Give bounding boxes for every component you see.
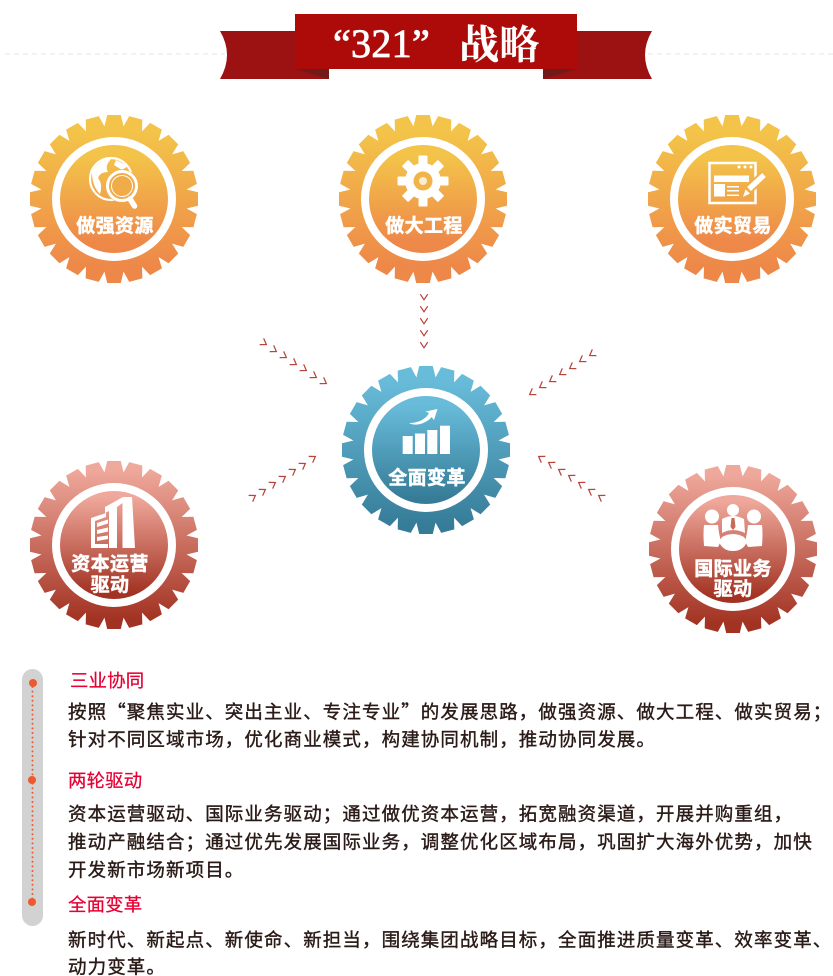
label: 做实贸易 [694,214,772,237]
title text: 战略 [459,14,540,70]
white ring [52,483,176,607]
text block: 三业协同 [68,667,832,752]
gear body [339,115,507,283]
gear body [30,461,198,629]
body: 推动产融结合；通过优先发展国际业务，调整优化区域布局，巩固扩大海外优势，加快 [68,828,813,854]
white ring [52,137,176,261]
title text: “321” [333,21,430,66]
label: 资本运营 [71,553,149,575]
inner disc [679,495,787,603]
inner disc [369,145,477,253]
arrow: lower left to centre [249,453,317,502]
label: 做大工程 [385,215,463,237]
gear: 全面变革 [342,366,510,534]
body: 按照“聚焦实业、突出主业、专注专业”的发展思路，做强资源、做大工程、做实贸易； [68,698,832,724]
body: 开发新市场新项目。 [68,856,244,882]
icon: office buildings [91,497,135,548]
white ring [671,487,795,611]
icon: three business people [704,504,762,551]
title banner [220,14,652,79]
rail node 1 [29,679,37,687]
rail node 3 [28,898,36,906]
gear body [342,366,510,534]
arrow: top gear to centre [420,294,428,348]
arrow: upper left to centre [260,338,328,387]
label second line: 驱动 [714,578,752,600]
label: 国际业务 [694,558,772,580]
gear: 做大工程 [339,115,507,283]
icon: rising bar chart [403,409,450,454]
gear body [648,115,816,283]
label: 做强资源 [76,215,154,237]
white ring [670,137,794,261]
icon: document and pencil [710,163,764,203]
banner left ribbon [220,31,329,79]
banner left fold [295,69,329,79]
inner disc [60,491,168,599]
body: 针对不同区域市场，优化商业模式，构建协同机制，推动协同发展。 [68,726,656,752]
gear: 做实贸易 [648,115,816,283]
banner main band [295,14,577,69]
rail dotted line [32,687,34,900]
heading: 全面变革 [68,891,142,917]
inner disc [372,396,480,504]
white ring [361,137,485,261]
icon: cog [398,156,448,206]
inner disc [60,145,168,253]
text block: 全面变革 [68,891,832,976]
gear: 国际业务驱动 [649,465,817,633]
icon: globe and magnifier [90,158,138,206]
rail node 2 [28,776,36,784]
gear: 资本运营驱动 [30,461,198,629]
rail background [22,669,43,926]
white ring [364,388,488,512]
label second line: 驱动 [91,574,129,596]
banner right fold [543,69,577,79]
banner right ribbon [543,31,652,79]
gear body [30,115,198,283]
arrow: upper right to centre [528,349,596,398]
body: 新时代、新起点、新使命、新担当，围绕集团战略目标，全面推进质量变革、效率变革、 [68,926,832,952]
label: 全面变革 [388,466,466,489]
text block: 两轮驱动 [68,767,813,882]
inner disc [678,145,786,253]
heading: 两轮驱动 [68,767,142,793]
gear: 做强资源 [30,115,198,283]
heading: 三业协同 [70,667,144,693]
gear body [649,465,817,633]
body: 资本运营驱动、国际业务驱动；通过做优资本运营，拓宽融资渠道，开展并购重组， [68,800,793,826]
timeline rail [22,669,43,926]
arrow: lower right to centre [537,453,605,502]
